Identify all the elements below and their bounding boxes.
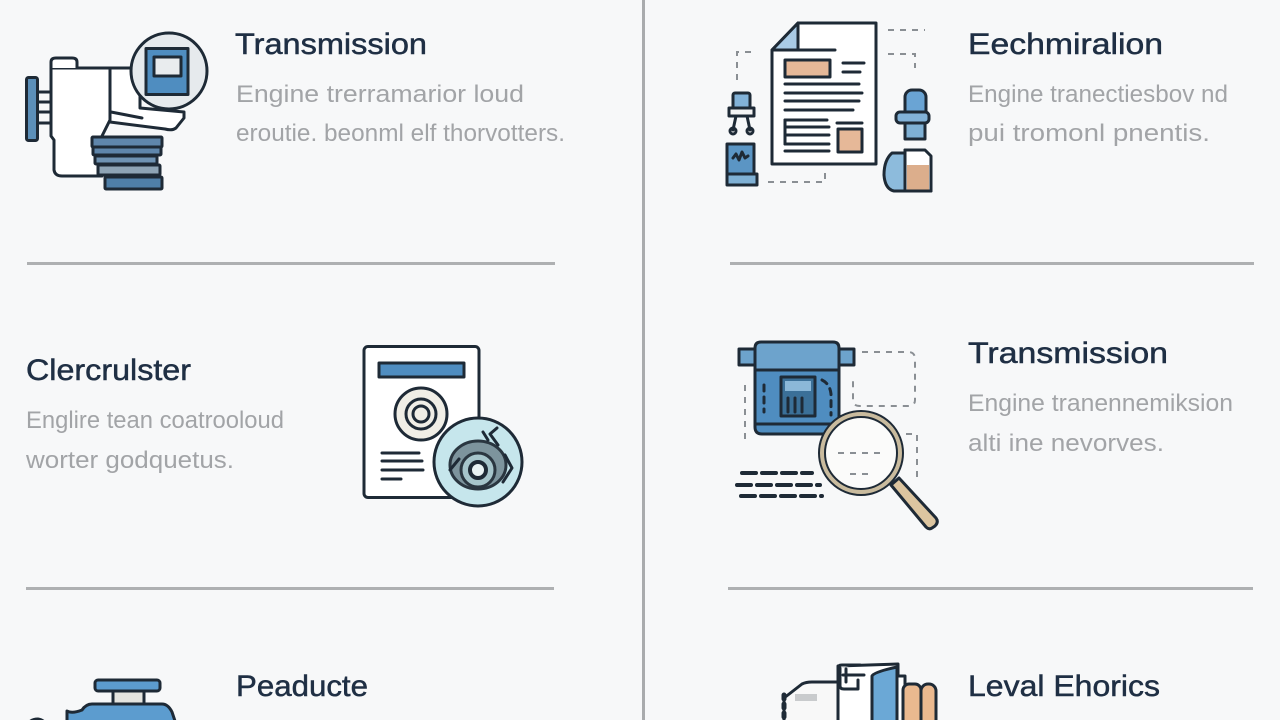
text block: control unit description: alti ine nevorves.: [968, 430, 1164, 457]
icon: transmission housing with magnifier: [26, 33, 207, 189]
heading: Eechmiralion: Eechmiralion: [968, 28, 1163, 61]
heading: Transmission: Transmission: [235, 28, 427, 61]
text block: cluster description: Englire tean coatrooloud: [26, 407, 284, 434]
heading: Transmission lower: Transmission: [968, 337, 1168, 370]
text block: transmission description: Engine trerramarior loud: [236, 81, 524, 108]
icon: pump (cropped at bottom): [25, 680, 178, 720]
icon: control unit with magnifying glass: [737, 342, 937, 529]
text block: document description: Engine tranectiesbov nd: [968, 81, 1228, 108]
text block: transmission description: [236, 81, 565, 147]
text block: control unit description: Engine tranennemiksion: [968, 390, 1233, 417]
icon: cluster document with gauge: [364, 346, 522, 506]
heading: Peaducte: Peaducte: [236, 670, 368, 703]
text block: document description: [968, 81, 1228, 147]
heading: Clercrulster: Clercrulster: [26, 354, 191, 387]
text block: cluster description: [25, 407, 284, 474]
text block: transmission description: eroutie. beonml elf thorvotters.: [236, 120, 565, 147]
icon: motor unit (cropped at bottom): [784, 664, 936, 720]
text block: document description: pui tromonl pnentis.: [968, 120, 1210, 147]
text block: control unit description: [968, 390, 1233, 457]
icon: technical document with valves: [727, 23, 931, 191]
heading: Leval Ehorics: Leval Ehorics: [968, 670, 1160, 703]
text block: cluster description: worter godquetus.: [25, 447, 234, 474]
